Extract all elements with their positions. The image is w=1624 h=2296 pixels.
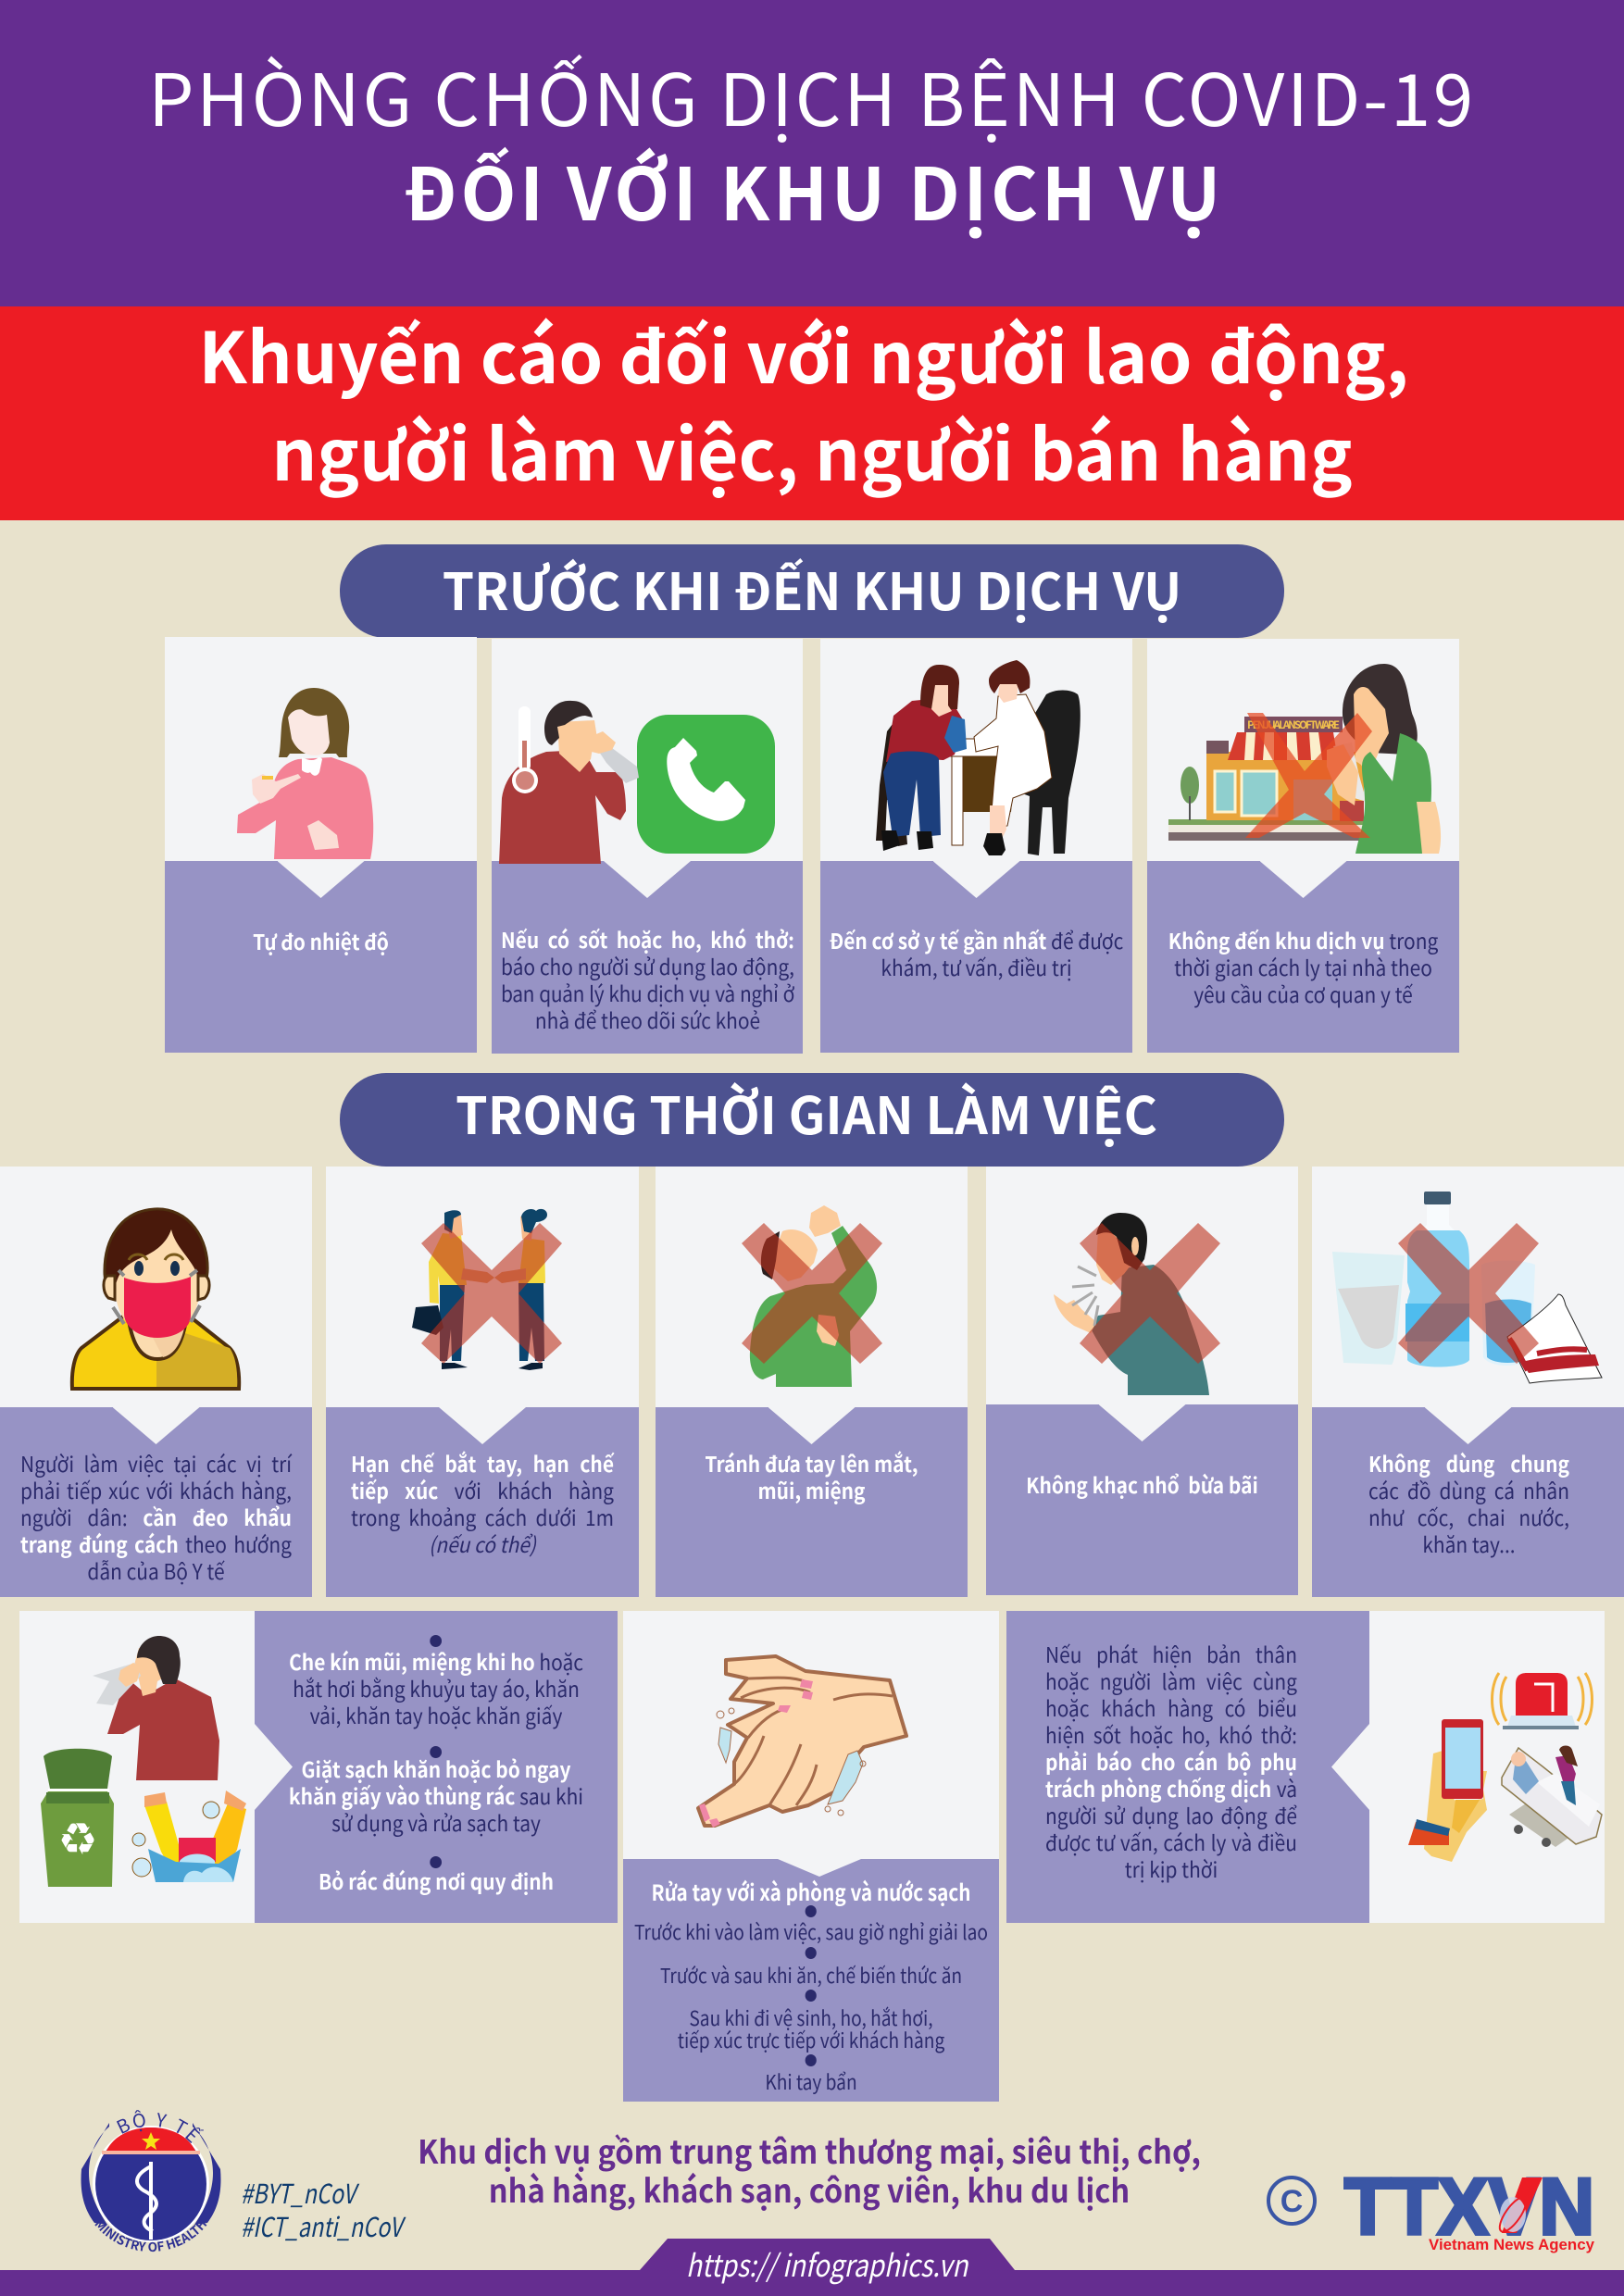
caption: Tránh đưa tay lên mắt, [705,1447,918,1479]
icon: washing hands [696,1654,909,1828]
caption: Nếu có sốt hoặc ho, khó thở: [501,923,794,955]
title line 2: ĐỐI VỚI KHU DỊCH VỤ [404,138,1224,242]
panel: cover mouth and dispose tissue [19,1611,618,1923]
caption [1168,924,1438,1009]
caption: khăn tay... [1422,1528,1516,1559]
notch [768,1407,856,1444]
icon: sick man and phone [499,700,775,864]
text panel [1147,861,1459,1053]
bullet list: Bỏ rác đúng nơi quy định [319,1865,554,1896]
caption: Người làm việc tại các vị trí [20,1447,292,1479]
hashtags [241,2173,406,2245]
copyright mark [1267,2176,1317,2226]
card: wear mask [0,1167,312,1597]
caption [1368,1447,1569,1559]
card: go to clinic [820,639,1132,1053]
logo: Ministry of Health: MINISTRY OF HEALTH [94,2223,207,2252]
handwash list: Sau khi đi vệ sinh, ho, hắt hơi, [689,2003,933,2032]
caption [351,1447,615,1559]
caption: Nếu phát hiện bản thân [1045,1638,1297,1669]
text panel [255,1611,618,1923]
hashtags: #BYT_nCoV [241,2173,356,2212]
notch [113,1407,200,1444]
logo: TTXVN: Vietnam News Agency [1429,2236,1595,2253]
card: report fever [492,639,803,1054]
panel: wash hands [623,1611,999,2102]
icon: man coughing crossed [1054,1213,1220,1395]
caption: phải báo cho cán bộ phụ [1045,1745,1297,1777]
footer note: Khu dịch vụ gồm trung tâm thương mại, siêu thị, chợ, [418,2127,1201,2174]
subtitle line 2: người làm việc, người bán hàng [271,399,1353,502]
caption: mũi, miệng [757,1474,866,1505]
caption: Tự đo nhiệt độ [253,925,389,956]
handwash list: Khi tay bẩn [765,2066,857,2096]
caption: trị kịp thời [1125,1853,1218,1884]
text panel [623,1859,999,2102]
bullet list: Che kín mũi, miệng khi ho hoặc [289,1645,583,1677]
bullet list: hắt hơi bằng khuỷu tay áo, khăn [293,1672,580,1703]
text panel [0,1407,312,1597]
caption: phải tiếp xúc với khách hàng, [20,1474,292,1505]
header band [0,0,1624,306]
red subtitle band [0,306,1624,520]
caption: khám, tư vấn, điều trị [881,951,1072,982]
handwash list: Rửa tay với xà phòng và nước sạch [651,1875,971,1907]
notch [1424,1407,1511,1444]
caption: tiếp xúc với khách hàng [351,1474,614,1505]
card: do not spit [986,1167,1298,1595]
caption: Không khạc nhổ bừa bãi [1026,1468,1258,1500]
caption: Đến cơ sở y tế gần nhất để được [830,924,1123,955]
caption [830,924,1123,982]
icon: glass, bottle, towel crossed [1332,1192,1603,1383]
section heading: before arriving: TRƯỚC KHI ĐẾN KHU DỊCH VỤ [443,551,1181,625]
text panel [326,1407,639,1597]
caption [501,923,794,1035]
icon: man sneezing, bin, gloves: ♻ [57,1814,98,1866]
caption: trang đúng cách theo hướng [20,1528,292,1559]
card: do not go out [1147,639,1459,1053]
copyright mark: C [1280,2184,1303,2219]
icon: woman with thermometer [237,688,374,859]
caption: báo cho người sử dụng lao động, [501,950,794,981]
caption: trách phòng chống dịch và [1045,1772,1297,1803]
arrow notch [255,1724,293,1810]
caption: Không dùng chung [1368,1447,1569,1479]
logo: Ministry of Health: BỘ Y TẾ [117,2110,204,2143]
section heading: before arriving [340,544,1284,638]
text panel [1312,1407,1624,1597]
caption: (nếu có thể) [429,1528,536,1559]
notch [1098,1404,1185,1441]
bullet list [289,1635,583,1896]
notch [278,861,365,898]
section heading: during work: TRONG THỜI GIAN LÀM VIỆC [456,1075,1157,1149]
text panel [656,1407,968,1597]
arrow notch [1331,1724,1369,1810]
text panel [986,1404,1298,1595]
caption [705,1447,918,1505]
icon: woman and crossed shop: PENJUALANSOFTWARE [1247,718,1340,732]
caption: người sử dụng lao động để [1045,1799,1297,1830]
handwash list: tiếp xúc trực tiếp với khách hàng [678,2025,944,2054]
caption: ban quản lý khu dịch vụ và nghỉ ở [501,977,794,1008]
caption: nhà để theo dõi sức khoẻ [535,1004,760,1035]
bullet list: vải, khăn tay hoặc khăn giấy [310,1699,562,1730]
handwash list: Trước và sau khi ăn, chế biến thức ăn [660,1960,962,1990]
caption: hoặc người làm việc cùng [1045,1665,1297,1696]
subtitle line 1: Khuyến cáo đối với người lao động, [198,302,1409,405]
notch [604,861,691,898]
handwash list [634,1875,988,2096]
caption: như cốc, chai nước, [1368,1501,1569,1532]
caption: thời gian cách ly tại nhà theo [1174,951,1432,982]
logo: Ministry of Health [81,2110,220,2252]
url tab: https:// infographics.vn [686,2241,968,2286]
icon: man sneezing, bin, gloves [41,1636,246,1887]
icon: person with red mask [70,1207,241,1391]
icon: handshake crossed [412,1209,562,1370]
title line 1: PHÒNG CHỐNG DỊCH BỆNH COVID-19 [148,44,1476,147]
caption: Hạn chế bắt tay, hạn chế [351,1447,614,1479]
notch [1259,861,1346,898]
hashtags: #ICT_anti_nCoV [241,2206,402,2245]
section heading: during work [340,1073,1284,1167]
url tab [640,2239,1015,2285]
panel: report symptoms [1006,1611,1605,1923]
caption: người dân: cần đeo khẩu [20,1501,292,1532]
footer bar [0,2270,1624,2296]
text panel [492,861,803,1054]
footer note [418,2127,1201,2213]
icon: woman and crossed shop [1168,664,1441,854]
handwash list: Trước khi vào làm việc, sau giờ nghỉ giải lao [634,1916,988,1946]
icon: alarm, phone, hospital bed [1408,1672,1603,1862]
caption: dẫn của Bộ Y tế [87,1554,225,1586]
notch [439,1407,526,1444]
caption: được tư vấn, cách ly và điều [1045,1826,1297,1857]
card: take temperature [165,637,477,1053]
caption: các đồ dùng cá nhân [1368,1474,1569,1505]
icon: man touching face crossed [742,1205,882,1387]
text panel [1006,1611,1369,1923]
card: do not share items [1312,1167,1624,1597]
caption: hoặc khách hàng có biểu [1045,1691,1297,1723]
caption [20,1447,293,1586]
text panel [820,861,1132,1053]
caption: hiện sốt hoặc ho, khó thở: [1045,1718,1297,1750]
text panel [165,861,477,1053]
notch [933,861,1020,898]
caption [1045,1638,1297,1884]
caption: Không đến khu dịch vụ trong [1168,924,1438,955]
caption: yêu cầu của cơ quan y tế [1193,978,1413,1009]
bullet list: Giặt sạch khăn hoặc bỏ ngay [302,1753,570,1784]
card: do not touch face [656,1167,968,1597]
icon: doctor and patient [876,660,1081,855]
caption: trong khoảng cách dưới 1m [351,1501,614,1532]
card: no handshake [326,1167,639,1597]
bullet list: khăn giấy vào thùng rác sau khi [289,1779,583,1811]
bullet list: sử dụng và rửa sạch tay [331,1806,541,1838]
notch [778,1859,861,1877]
footer note: nhà hàng, khách sạn, công viên, khu du lịch [489,2165,1130,2213]
